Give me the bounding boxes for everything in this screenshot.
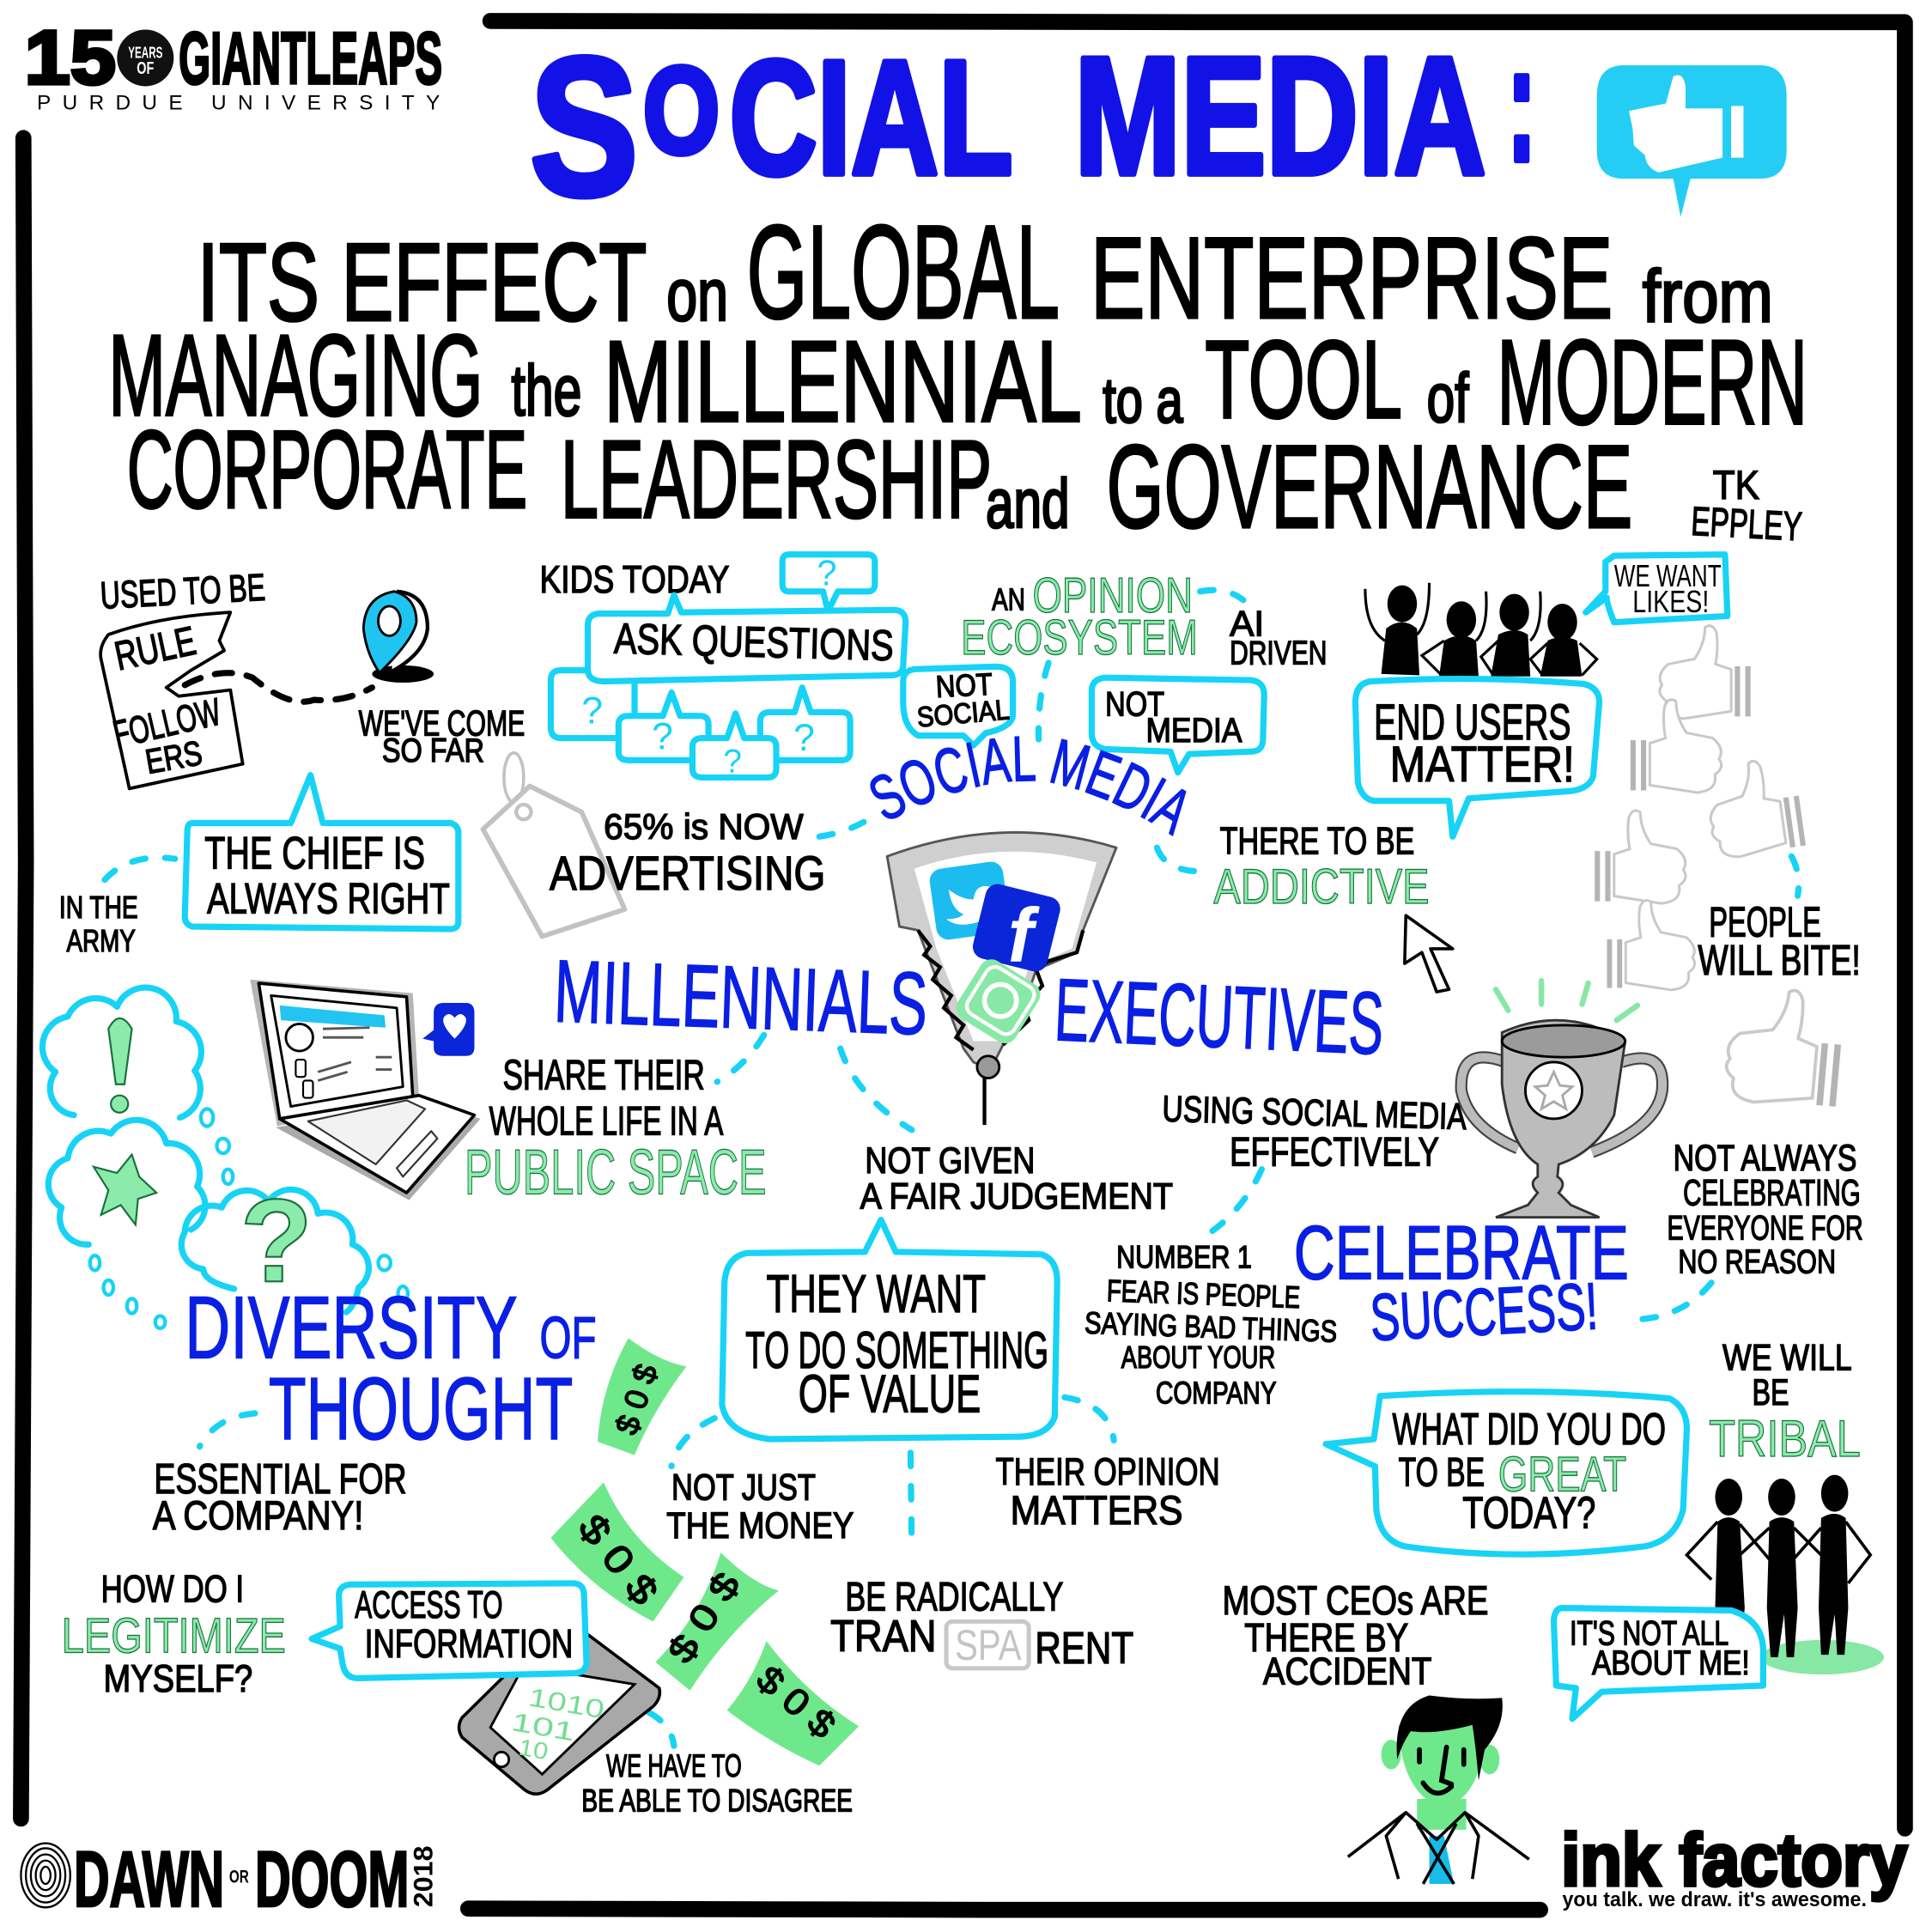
logo: 150 years of giant leaps: OF [137, 59, 154, 78]
be radically transparent: TRAN [830, 1611, 937, 1661]
kids today label: KIDS TODAY [540, 559, 729, 601]
subtitle: ITS EFFECT [197, 221, 647, 344]
we have to be able to disagree: BE ABLE TO DISAGREE [581, 1782, 853, 1818]
subtitle: ENTERPRISE [1091, 213, 1613, 343]
icon: torn rule followers note [100, 612, 243, 788]
what did you do to be great today: GREAT [1498, 1447, 1626, 1502]
icon: money notes: $ 0 $ [749, 1658, 843, 1747]
number 1 fear: ABOUT YOUR [1121, 1340, 1275, 1375]
icon: tablet with binary: 101 [509, 1708, 577, 1747]
how do i legitimize myself [62, 1568, 286, 1700]
logo: dawn or doom 2018: DAWN [74, 1836, 224, 1923]
presenter name: EPPLEY [1690, 499, 1803, 550]
their opinion matters: MATTERS [1011, 1488, 1183, 1534]
there to be addictive [1213, 820, 1430, 914]
logo: 150 years of giant leaps [25, 15, 442, 115]
logo: 150 years of giant leaps: GIANTLEAPS [179, 18, 442, 100]
not media bubble: MEDIA [1146, 711, 1242, 750]
title: social media [530, 11, 1536, 237]
be radically transparent [830, 1574, 1133, 1673]
icon: exclamation, star and question mark [94, 1018, 313, 1307]
it's not all about me: IT'S NOT ALL [1570, 1614, 1728, 1653]
end users crowd [1365, 583, 1597, 677]
subtitle: to a [1103, 364, 1183, 436]
icon: torn rule followers note: ERS [143, 733, 205, 781]
we want likes bubble: LIKES! [1632, 585, 1709, 619]
share their whole life in a public space [465, 1052, 767, 1207]
icon: cursor arrow [1405, 915, 1453, 992]
most ceos are there by accident [1222, 1578, 1488, 1693]
the chief is always right: THE CHIEF IS [204, 829, 425, 879]
be radically transparent: SPA [955, 1621, 1022, 1669]
connector dashes [105, 590, 1799, 1746]
icon: thumbs up speech bubble [1597, 65, 1787, 217]
we will be tribal: WE WILL [1722, 1338, 1852, 1379]
not just the money [666, 1467, 854, 1546]
people will bite: PEOPLE [1709, 900, 1821, 946]
question bubbles [550, 553, 875, 781]
logo: 150 years of giant leaps: PURDUE UNIVERSITY [37, 92, 440, 115]
subtitle: the [512, 351, 581, 431]
using social media effectively [1162, 1089, 1467, 1175]
curved social media heading [870, 736, 1187, 836]
not social bubble: NOT [935, 667, 993, 704]
tribal silhouettes [1686, 1475, 1884, 1674]
celebrate success heading: CELEBRATE [1294, 1209, 1629, 1295]
people will bite: WILL BITE! [1698, 938, 1861, 984]
subtitle: MILLENNIAL [604, 317, 1082, 447]
in the army: ARMY [66, 924, 136, 958]
subtitle: CORPORATE [127, 408, 527, 532]
diversity of thought heading: DIVERSITY [185, 1277, 518, 1376]
icon: price tag [483, 753, 625, 937]
not just the money: THE MONEY [666, 1505, 854, 1546]
subtitle [108, 197, 1807, 553]
question bubbles: ? [793, 717, 815, 759]
access to information: INFORMATION [365, 1621, 573, 1666]
title: social media: CIAL [729, 27, 1013, 209]
we want likes bubble [1586, 555, 1728, 623]
essential for a company: ESSENTIAL FOR [154, 1456, 407, 1503]
there to be addictive: ADDICTIVE [1213, 860, 1430, 914]
subtitle: and [986, 465, 1070, 543]
not given a fair judgement: NOT GIVEN [865, 1140, 1035, 1182]
people will bite [1698, 900, 1861, 984]
icon: trophy with rays [1461, 981, 1662, 1218]
end users matter bubble: MATTER! [1390, 737, 1575, 793]
celebrate success heading [1294, 1209, 1629, 1355]
it's not all about me [1553, 1608, 1763, 1719]
end users matter bubble: END USERS [1374, 695, 1571, 750]
it's not all about me: ABOUT ME! [1592, 1643, 1750, 1682]
subtitle: MANAGING [108, 311, 483, 440]
title: social media: S [530, 16, 638, 237]
we've come so far: WE'VE COME [359, 703, 525, 744]
we will be tribal: TRIBAL [1709, 1409, 1861, 1467]
we will be tribal [1709, 1338, 1861, 1467]
we have to be able to disagree: WE HAVE TO [606, 1747, 742, 1783]
most ceos are there by accident: ACCIDENT [1263, 1651, 1431, 1693]
title: social media: : [1507, 11, 1536, 197]
icon: cracked device with social apps: f [1008, 891, 1041, 977]
icon: tablet with binary [459, 1631, 659, 1794]
what did you do to be great today: WHAT DID YOU DO [1392, 1404, 1666, 1454]
dashed path to map pin [185, 673, 372, 702]
icon: heart message [422, 1003, 474, 1056]
subtitle: GOVERNANCE [1107, 421, 1632, 553]
icon: money notes: $ 0 $ [608, 1359, 665, 1439]
logo: dawn or doom 2018: DOOM [255, 1836, 409, 1923]
ask questions box [587, 595, 906, 682]
question bubbles: ? [723, 744, 742, 781]
icon: map pin [363, 592, 434, 683]
subtitle: on [666, 254, 728, 337]
icon: money notes: $ 0 $ [570, 1505, 667, 1613]
not just the money: NOT JUST [671, 1467, 816, 1508]
subtitle: GLOBAL [747, 197, 1060, 346]
subtitle: TOOL [1205, 318, 1402, 441]
icon: businessman [1348, 1695, 1529, 1884]
in the army [59, 890, 138, 958]
we've come so far [359, 703, 525, 769]
millennials heading: MILLENNIALS [553, 941, 929, 1054]
not media bubble: NOT [1105, 685, 1164, 724]
number 1 fear: SAYING BAD THINGS [1084, 1306, 1338, 1349]
how do i legitimize myself: HOW DO I [101, 1568, 244, 1610]
65% advertising [550, 806, 825, 900]
number 1 fear [1084, 1239, 1338, 1410]
title: social media: O [643, 42, 720, 179]
essential for a company [153, 1456, 407, 1539]
icon: money notes: $ 0 $ [660, 1565, 749, 1670]
icon: cracked device with social apps [887, 832, 1116, 1125]
icon: tablet with binary: 10 [517, 1734, 550, 1765]
not always celebrating [1667, 1138, 1863, 1280]
executives heading: EXECUTIVES [1053, 959, 1386, 1073]
not given a fair judgement [860, 1140, 1173, 1218]
logo: ink factory: you talk. we draw. it's awesome. [1563, 1889, 1867, 1911]
number 1 fear: NUMBER 1 [1116, 1239, 1252, 1275]
icons: gray thumbs [1597, 626, 1842, 1109]
access to information: ACCESS TO [355, 1584, 502, 1626]
opinion ecosystem: AN [992, 582, 1025, 617]
diversity of thought heading: OF [540, 1304, 597, 1370]
icon: torn rule followers note: RULE [111, 618, 200, 679]
icon: tablet with binary: 1010 [526, 1683, 606, 1724]
logo: dawn or doom 2018 [21, 1836, 439, 1923]
share their whole life in a public space: SHARE THEIR [502, 1052, 705, 1098]
essential for a company: A COMPANY! [153, 1493, 363, 1539]
share their whole life in a public space: WHOLE LIFE IN A [489, 1099, 724, 1145]
how do i legitimize myself: MYSELF? [104, 1658, 252, 1700]
the chief is always right: ALWAYS RIGHT [207, 874, 450, 922]
icon: torn rule followers note: FOLLOW [110, 691, 225, 756]
how do i legitimize myself: LEGITIMIZE [62, 1608, 286, 1663]
not always celebrating: NOT ALWAYS [1674, 1138, 1856, 1179]
we've come so far: SO FAR [382, 732, 484, 769]
in the army: IN THE [59, 890, 138, 925]
their opinion matters: THEIR OPINION [995, 1451, 1220, 1493]
question bubbles: ? [817, 553, 837, 593]
used to be label: USED TO BE [100, 567, 266, 617]
subtitle: of [1427, 360, 1469, 437]
title: social media: MEDIA [1074, 22, 1486, 210]
they want to do something of value [722, 1220, 1057, 1439]
diversity of thought heading [185, 1277, 597, 1458]
we will be tribal: BE [1752, 1372, 1789, 1413]
end users matter bubble [1355, 679, 1600, 836]
not social bubble [903, 666, 1013, 745]
logo: dawn or doom 2018: OR [229, 1867, 249, 1887]
what did you do to be great today: TO BE [1399, 1450, 1485, 1496]
they want to do something of value: TO DO SOMETHING [745, 1321, 1048, 1379]
icon: money notes [550, 1338, 859, 1765]
they want to do something of value: THEY WANT [767, 1265, 986, 1324]
not media bubble [1091, 677, 1264, 773]
thought clouds [42, 987, 408, 1328]
logo: 150 years of giant leaps: YEARS [128, 43, 162, 61]
presenter name: TK [1713, 463, 1759, 508]
logo: ink factory: ink factory [1561, 1819, 1907, 1901]
presenter name [1690, 463, 1803, 550]
opinion ecosystem: OPINION [1032, 568, 1193, 623]
logo: 150 years of giant leaps: 15 [25, 15, 116, 100]
what did you do to be great today [1326, 1392, 1686, 1554]
using social media effectively: EFFECTIVELY [1230, 1129, 1439, 1175]
most ceos are there by accident: MOST CEOs ARE [1222, 1578, 1488, 1624]
curved social media heading: SOCIAL MEDIA [870, 736, 1187, 836]
number 1 fear: FEAR IS PEOPLE [1106, 1273, 1301, 1315]
opinion ecosystem: ECOSYSTEM [961, 611, 1198, 665]
ask questions box: ASK QUESTIONS [613, 615, 894, 670]
we want likes bubble: WE WANT [1614, 559, 1722, 593]
access to information [312, 1583, 586, 1678]
their opinion matters [995, 1451, 1220, 1534]
icon: exclamation, star and question mark: ? [240, 1175, 313, 1307]
icon: laptop [250, 980, 481, 1200]
we have to be able to disagree [581, 1747, 853, 1818]
be radically transparent: BE RADICALLY [845, 1574, 1063, 1619]
not given a fair judgement: A FAIR JUDGEMENT [860, 1176, 1173, 1218]
diversity of thought heading: THOUGHT [269, 1358, 573, 1458]
celebrate success heading: SUCCESS! [1368, 1269, 1600, 1355]
not social bubble: SOCIAL [915, 693, 1011, 733]
65% advertising: 65% is NOW [604, 806, 804, 847]
question bubbles: ? [581, 690, 603, 732]
share their whole life in a public space: PUBLIC SPACE [465, 1135, 767, 1207]
logo: dawn or doom 2018: 2018 [408, 1846, 439, 1907]
subtitle: LEADERSHIP [561, 418, 992, 542]
most ceos are there by accident: THERE BY [1244, 1615, 1408, 1660]
ai driven [1230, 603, 1327, 671]
ai driven: DRIVEN [1230, 635, 1327, 671]
they want to do something of value: OF VALUE [799, 1364, 981, 1424]
ai driven: AI [1230, 603, 1264, 643]
opinion ecosystem [961, 568, 1198, 665]
number 1 fear: COMPANY [1156, 1376, 1277, 1410]
be radically transparent: RENT [1035, 1623, 1133, 1673]
not always celebrating: NO REASON [1678, 1243, 1836, 1280]
subtitle: from [1643, 256, 1773, 338]
the chief is always right [185, 775, 459, 929]
question bubbles: ? [652, 715, 673, 757]
what did you do to be great today: TODAY? [1462, 1487, 1595, 1537]
65% advertising: ADVERTISING [550, 846, 825, 900]
there to be addictive: THERE TO BE [1220, 820, 1414, 862]
using social media effectively: USING SOCIAL MEDIA [1162, 1089, 1467, 1138]
